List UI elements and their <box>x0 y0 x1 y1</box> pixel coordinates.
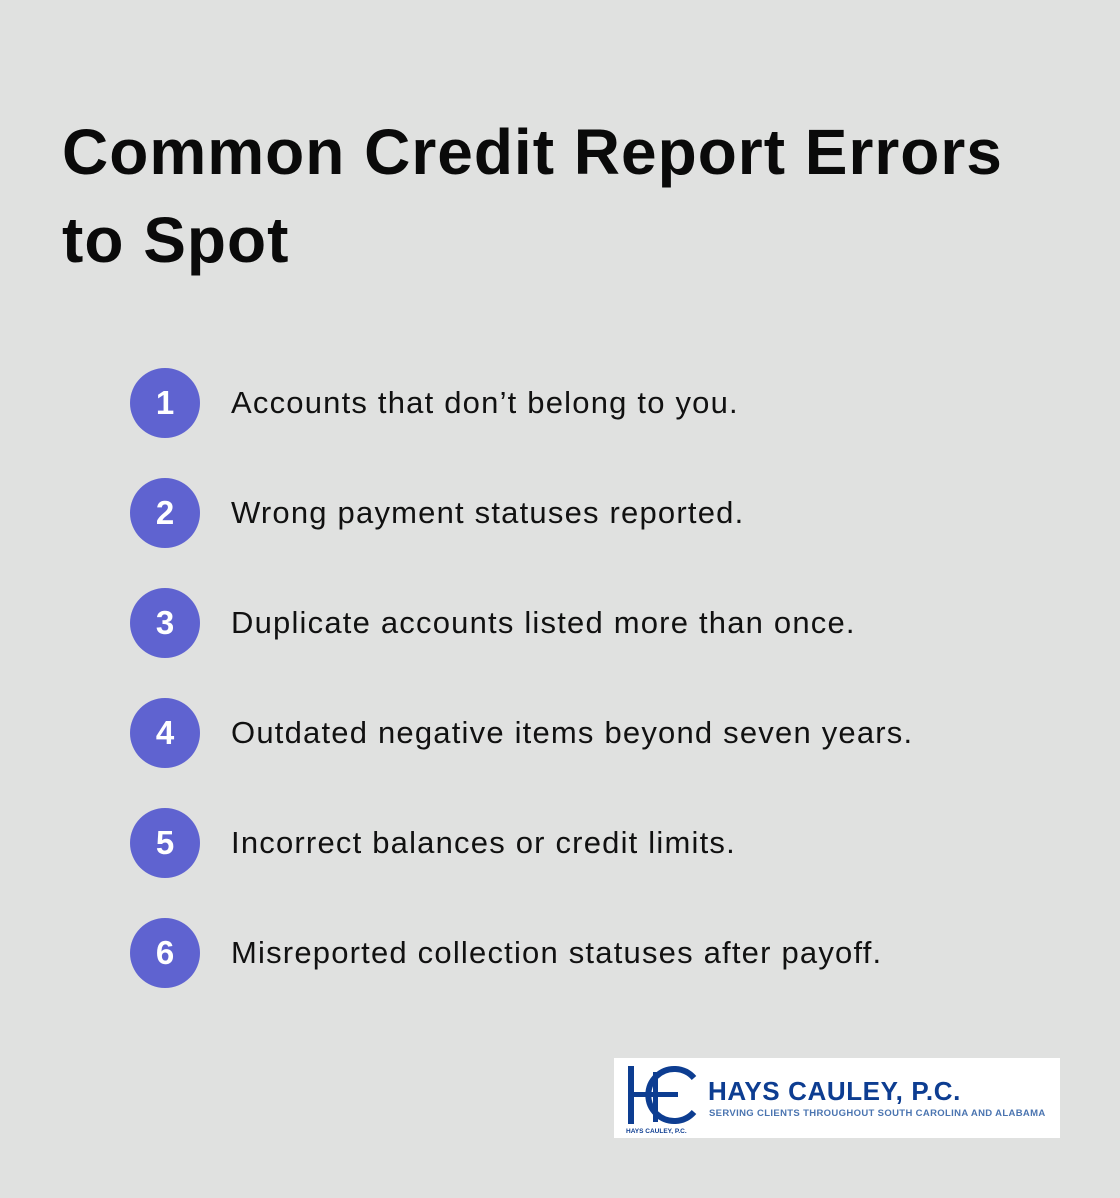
item 6: Misreported collection statuses after payoff. <box>231 935 882 970</box>
icon: HC monogram <box>628 1066 696 1124</box>
item 4 <box>130 698 913 768</box>
item 5: Incorrect balances or credit limits. <box>231 825 736 860</box>
item 6 <box>130 918 882 988</box>
item 4: 4 <box>156 714 174 751</box>
logo tagline: SERVING CLIENTS THROUGHOUT SOUTH CAROLINA AND ALABAMA <box>709 1108 1046 1119</box>
item 3: Duplicate accounts listed more than once. <box>231 605 856 640</box>
title: Common Credit Report Errors <box>62 116 1003 188</box>
logo small text: HAYS CAULEY, P.C. <box>626 1128 687 1135</box>
item 2 <box>130 478 744 548</box>
item 4: Outdated negative items beyond seven years. <box>231 715 913 750</box>
logo name: HAYS CAULEY, P.C. <box>708 1076 961 1106</box>
list of errors <box>130 368 913 988</box>
item 2: Wrong payment statuses reported. <box>231 495 744 530</box>
title: to Spot <box>62 204 289 276</box>
item 5: 5 <box>156 824 174 861</box>
item 1: 1 <box>156 384 174 421</box>
title <box>62 116 1003 276</box>
item 3 <box>130 588 856 658</box>
logo <box>614 1058 1060 1138</box>
item 3: 3 <box>156 604 174 641</box>
item 1 <box>130 368 739 438</box>
item 1: Accounts that don’t belong to you. <box>231 385 739 420</box>
item 2: 2 <box>156 494 174 531</box>
item 6: 6 <box>156 934 174 971</box>
item 5 <box>130 808 736 878</box>
